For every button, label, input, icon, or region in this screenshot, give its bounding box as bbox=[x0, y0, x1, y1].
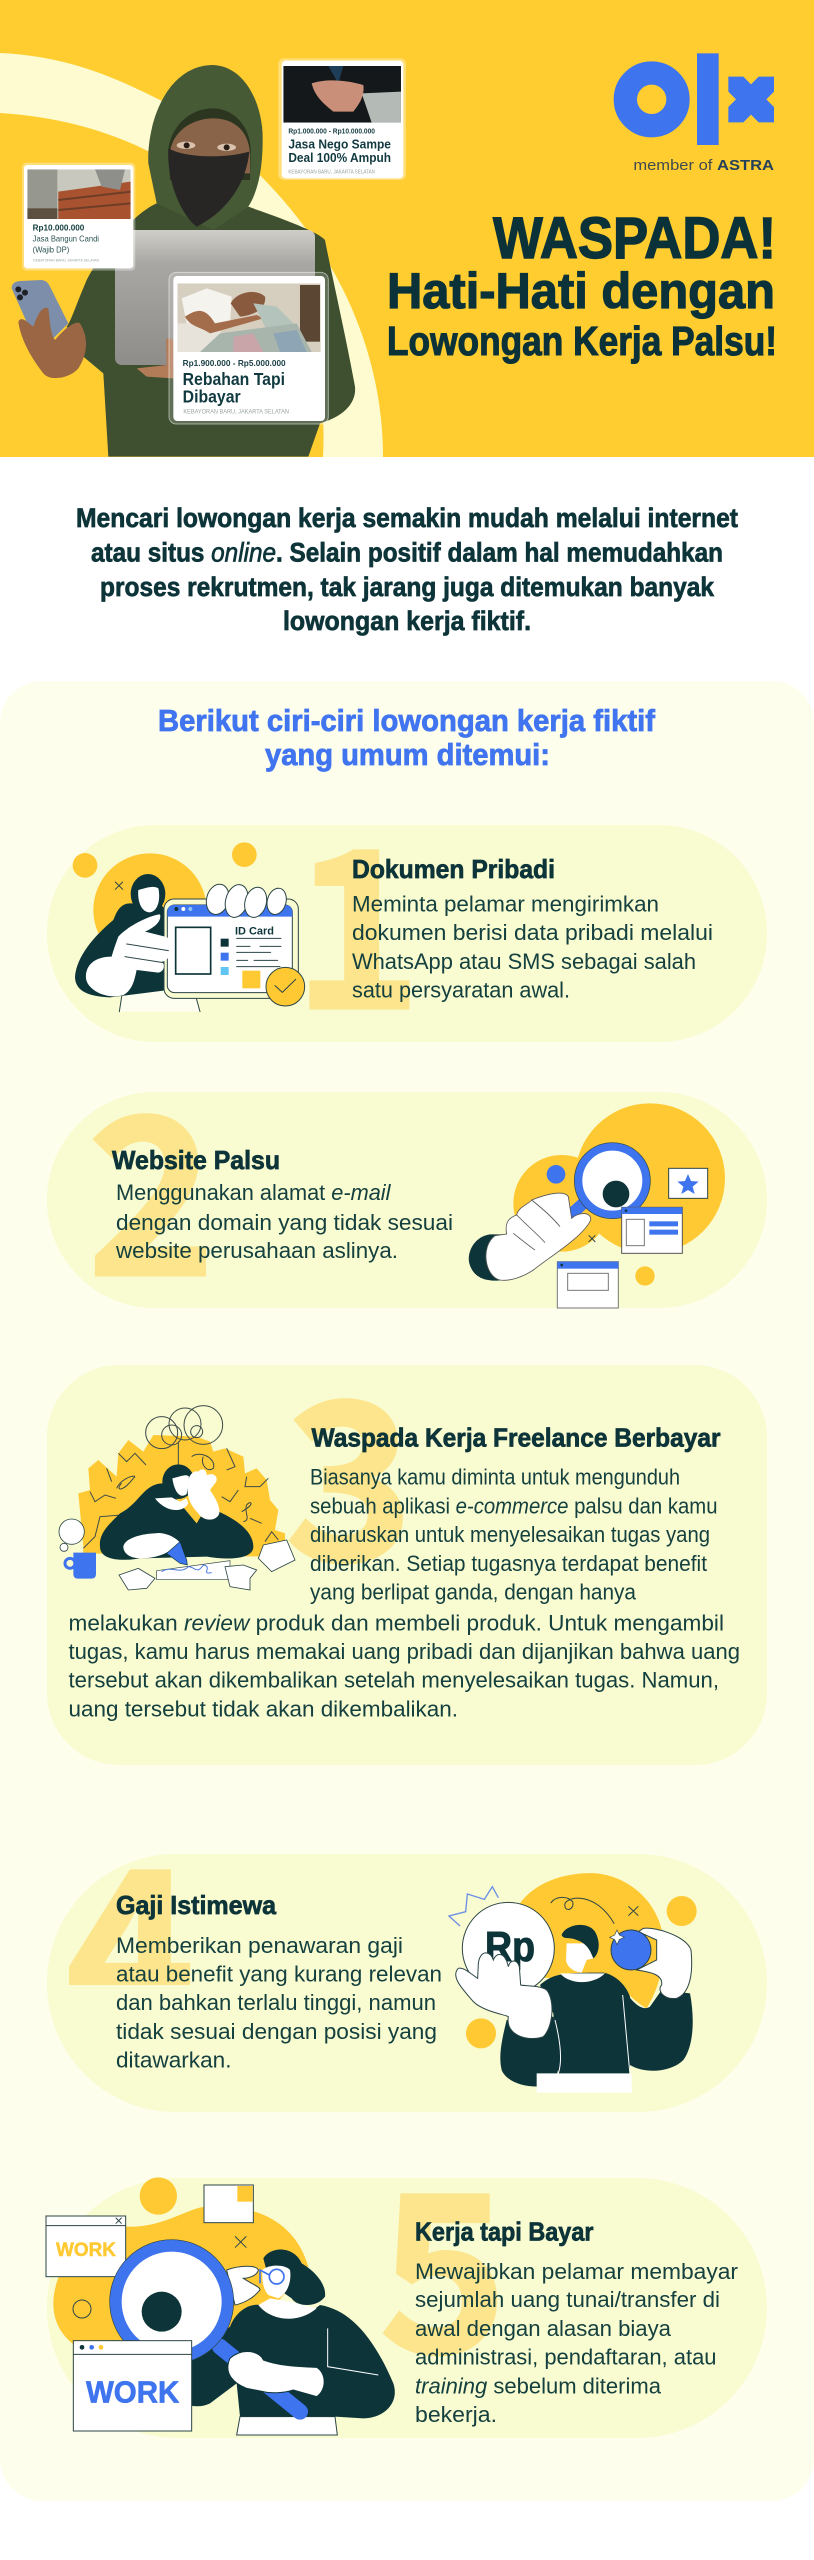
item 2 text: Menggunakan alamat e-mail bbox=[116, 1180, 392, 1205]
card: jasa bangun candi: Rp10.000.000 bbox=[33, 223, 84, 233]
card: rebahan tapi dibayar: Rebahan Tapi bbox=[183, 369, 285, 389]
item 4 text: Memberikan penawaran gaji bbox=[116, 1933, 403, 1958]
item 1 text: dokumen berisi data pribadi melalui bbox=[352, 920, 713, 945]
panel: item 2 website palsu bbox=[47, 1022, 767, 1338]
intro paragraph: Mencari lowongan kerja semakin mudah melalui internet bbox=[76, 503, 738, 533]
lower hand bbox=[137, 338, 173, 378]
number 1: 1 bbox=[293, 755, 422, 1071]
card: jasa bangun candi: (Wajib DP) bbox=[33, 245, 69, 255]
item 3 text: Biasanya kamu diminta untuk mengunduh bbox=[310, 1464, 680, 1490]
card: rebahan tapi dibayar: Dibayar bbox=[183, 387, 241, 407]
card: jasa nego: Jasa Nego Sampe bbox=[288, 136, 391, 151]
item 1 text bbox=[352, 892, 713, 1002]
item 4 text: ditawarkan. bbox=[116, 2048, 232, 2072]
title: Hati-Hati dengan bbox=[387, 263, 775, 319]
logo: OLX member of Astra bbox=[625, 53, 774, 174]
decorative arc bbox=[0, 53, 383, 457]
card: rebahan tapi dibayar bbox=[169, 272, 328, 424]
item 4 text: dan bahkan terlalu tinggi, namun bbox=[116, 1990, 436, 2015]
illustration: magnifier and windows bbox=[469, 1103, 725, 1308]
mask bbox=[168, 148, 249, 227]
panel: item 3 kerja freelance bbox=[47, 1307, 767, 1765]
card: jasa nego bbox=[278, 58, 406, 180]
item 3 text: tersebut akan dikembalikan setelah menyelesaikan tugas. Namun, bbox=[68, 1668, 719, 1692]
phone and hand bbox=[12, 280, 68, 345]
panel: hero banner bbox=[0, 0, 814, 457]
logo: OLX member of Astra: member of ASTRA bbox=[633, 158, 774, 174]
panel: item 5 kerja tapi bayar bbox=[46, 2099, 767, 2438]
illustration: id card bbox=[73, 842, 305, 1012]
panel: item 4 gaji istimewa bbox=[47, 1854, 767, 2112]
item 4 text bbox=[116, 1933, 442, 2072]
hoodie body bbox=[67, 203, 355, 457]
item 4 text: atau benefit yang kurang relevan bbox=[116, 1962, 442, 1986]
item 3 text: uang tersebut tidak akan dikembalikan. bbox=[68, 1696, 458, 1722]
card: jasa nego: KEBAYORAN BARU, JAKARTA SELATAN bbox=[288, 169, 375, 175]
section heading bbox=[158, 703, 656, 772]
card: jasa bangun candi: Jasa Bangun Candi bbox=[33, 234, 99, 244]
intro paragraph: lowongan kerja fiktif. bbox=[283, 606, 531, 636]
illustration: man with coin: Rp bbox=[485, 1924, 535, 1970]
hero person with laptop and job cards bbox=[12, 58, 406, 457]
card: jasa bangun candi bbox=[22, 163, 135, 271]
number 2: 2 bbox=[87, 1022, 216, 1338]
item 5 text: training sebelum diterima bbox=[415, 2374, 662, 2398]
item 5 text: awal dengan alasan biaya bbox=[415, 2316, 672, 2341]
intro paragraph bbox=[76, 503, 738, 636]
item 5 text: administrasi, pendaftaran, atau bbox=[415, 2344, 716, 2370]
item 3 text: tugas, kamu harus memakai uang pribadi dan dijanjikan bahwa uang bbox=[68, 1639, 740, 1664]
illustration: woman with magnifier: WORK bbox=[56, 2240, 116, 2261]
number 3: 3 bbox=[285, 1307, 414, 1623]
item 5 text bbox=[415, 2259, 738, 2427]
illustration: woman with magnifier: WORK bbox=[86, 2375, 179, 2409]
panel: list background bbox=[0, 681, 814, 2501]
item 1 text: WhatsApp atau SMS sebagai salah bbox=[352, 949, 696, 974]
item 3 text: diberikan. Setiap tugasnya terdapat benefit bbox=[310, 1551, 707, 1576]
card: jasa bangun candi: KEBAYORAN BARU, JAKARTA SELATAN bbox=[33, 257, 99, 262]
item 1 text: Meminta pelamar mengirimkan bbox=[352, 892, 659, 916]
intro paragraph: proses rekrutmen, tak jarang juga ditemukan banyak bbox=[100, 572, 715, 602]
number 4: 4 bbox=[66, 1775, 195, 2091]
hood bbox=[148, 65, 263, 230]
item 3 text: diharuskan untuk menyelesaikan tugas yang bbox=[310, 1522, 710, 1547]
card: rebahan tapi dibayar: KEBAYORAN BARU, JAKARTA SELATAN bbox=[183, 409, 289, 416]
item 2 text: website perusahaan aslinya. bbox=[115, 1238, 398, 1263]
item 2 heading: Website Palsu bbox=[112, 1145, 280, 1175]
illustration: woman with magnifier bbox=[46, 2177, 395, 2435]
item 3 text: melakukan review produk dan membeli produk. Untuk mengambil bbox=[68, 1610, 724, 1636]
item 2 text: dengan domain yang tidak sesuai bbox=[116, 1210, 453, 1235]
item 4 heading: Gaji Istimewa bbox=[116, 1890, 277, 1920]
title bbox=[387, 206, 777, 364]
item 5 text: Mewajibkan pelamar membayar bbox=[415, 2259, 738, 2284]
item 1 heading: Dokumen Pribadi bbox=[352, 854, 555, 884]
card: jasa nego: Deal 100% Ampuh bbox=[288, 150, 391, 165]
item 4 text: tidak sesuai dengan posisi yang bbox=[116, 2019, 437, 2044]
item 5 text: bekerja. bbox=[415, 2402, 497, 2427]
item 3 text: sebuah aplikasi e-commerce palsu dan kamu bbox=[310, 1494, 718, 1518]
item 3 text: yang berlipat ganda, dengan hanya bbox=[310, 1580, 637, 1604]
section heading: Berikut ciri-ciri lowongan kerja fiktif bbox=[158, 703, 656, 738]
item 1 text: satu persyaratan awal. bbox=[352, 978, 570, 1002]
card: jasa nego: Rp1.000.000 - Rp10.000.000 bbox=[288, 129, 375, 136]
face bbox=[168, 108, 251, 180]
laptop bbox=[115, 230, 315, 365]
intro paragraph: atau situs online. Selain positif dalam hal memudahkan bbox=[91, 538, 723, 568]
illustration: stressed freelancer bbox=[59, 1406, 295, 1590]
illustration: man with coin bbox=[449, 1873, 697, 2093]
item 3 heading: Waspada Kerja Freelance Berbayar bbox=[312, 1422, 720, 1452]
number 5: 5 bbox=[379, 2099, 508, 2415]
section heading: yang umum ditemui: bbox=[265, 737, 550, 772]
item 5 text: sejumlah uang tunai/transfer di bbox=[415, 2287, 720, 2312]
item 5 heading: Kerja tapi Bayar bbox=[415, 2216, 594, 2246]
item 3 text bbox=[68, 1464, 740, 1722]
illustration: id card: ID Card bbox=[235, 925, 274, 937]
card: rebahan tapi dibayar: Rp1.900.000 - Rp5.000.000 bbox=[183, 358, 286, 368]
item 2 text bbox=[115, 1180, 453, 1263]
title: WASPADA! bbox=[493, 206, 776, 271]
panel: item 1 dokumen pribadi bbox=[47, 755, 767, 1071]
